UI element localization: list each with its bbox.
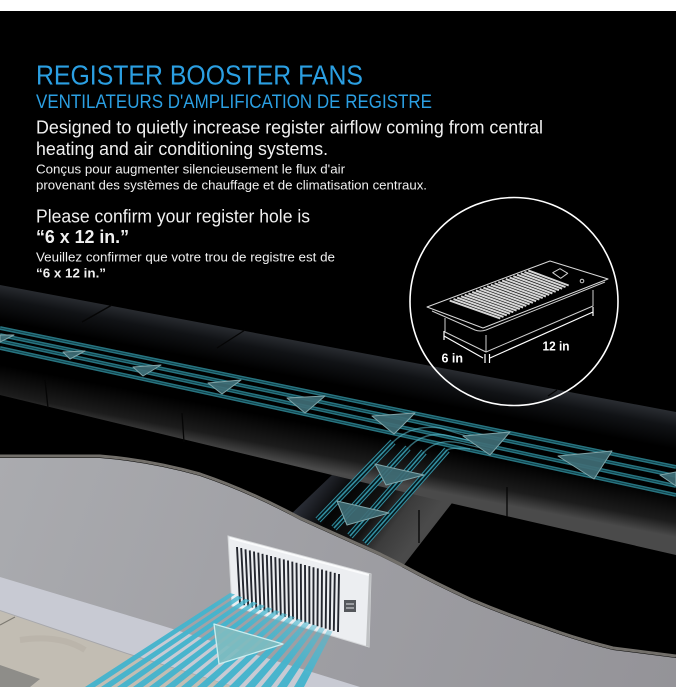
french description: Conçus pour augmenter silencieusement le flux d'air (36, 162, 346, 176)
airflow lines: out of register (85, 593, 332, 687)
airflow lines: main duct (0, 328, 676, 495)
french description line two: provenant des systèmes de chauffage et de climatisation centraux. (36, 178, 427, 192)
french size: “6 x 12 in.” (36, 266, 106, 280)
airflow lines: branch duct (318, 427, 490, 543)
french confirmation: Veuillez confirmer que votre trou de registre est de (36, 250, 335, 264)
baseboard (0, 577, 360, 687)
label: 6 in: 6 in (442, 352, 463, 366)
title: REGISTER BOOSTER FANS (36, 60, 363, 90)
register outline icon (427, 261, 608, 352)
english confirmation: Please confirm your register hole is (36, 206, 310, 226)
english size: “6 x 12 in.” (36, 226, 129, 247)
register vent (228, 536, 371, 647)
callout circle (410, 198, 618, 406)
english description line two: heating and air conditioning systems. (36, 138, 328, 159)
dimension lines (444, 307, 593, 363)
callout: register hole size (410, 198, 618, 406)
label: 12 in: 12 in (542, 340, 570, 354)
subtitle: VENTILATEURS D'AMPLIFICATION DE REGISTRE (36, 91, 432, 113)
confirmation text (36, 206, 335, 280)
wall (0, 456, 676, 687)
branch duct (288, 475, 452, 570)
floor (0, 611, 235, 687)
title block (36, 60, 432, 113)
airflow arrows: ducts (0, 335, 676, 525)
english description: Designed to quietly increase register airflow coming from central (36, 116, 543, 138)
main duct (0, 285, 676, 555)
description text (36, 116, 543, 192)
airflow arrow: register (214, 624, 283, 664)
